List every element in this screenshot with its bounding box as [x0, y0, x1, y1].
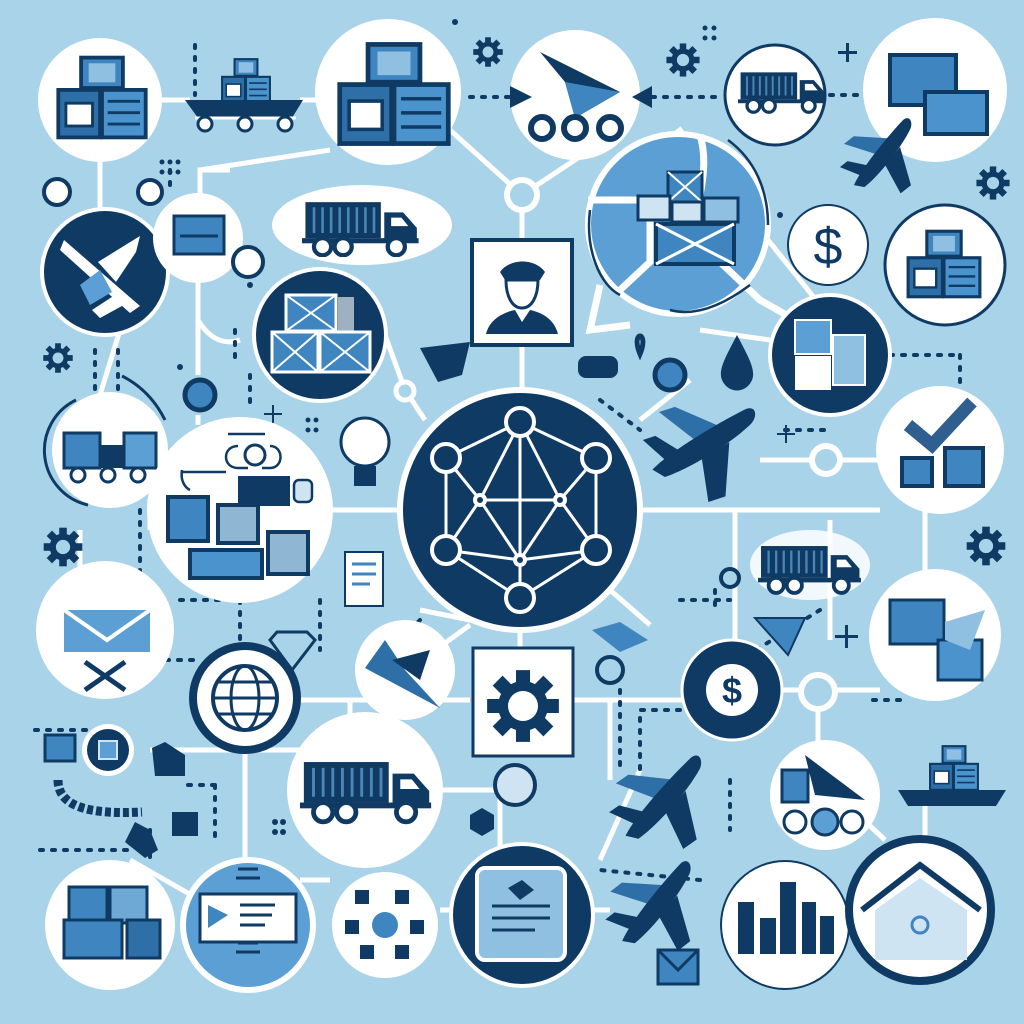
panel: plane small circle	[355, 620, 455, 720]
panel: truck left	[44, 376, 168, 508]
arrow: into plane, left	[510, 86, 532, 108]
node: ring small centre	[597, 657, 623, 683]
panel: large boxes left	[147, 417, 333, 603]
icon: gear left	[43, 343, 73, 373]
panel: house	[849, 839, 991, 981]
node: ring target	[495, 765, 535, 805]
node: ring left	[185, 380, 215, 410]
panel: chain and small crates	[45, 724, 198, 858]
icon: plane lower centre	[598, 735, 737, 872]
icon: light bulb	[341, 418, 389, 486]
panel: truck bottom	[287, 712, 443, 868]
icon: cargo ship	[185, 59, 303, 131]
node: ring top	[507, 180, 537, 210]
icon: cargo ship lower	[898, 746, 1006, 806]
small scattered dots and plus marks	[160, 19, 914, 835]
node: ring lower right	[801, 675, 835, 709]
panel: navy boxes right	[770, 295, 890, 415]
icon: plane bottom	[594, 843, 727, 974]
icon: plane top right	[830, 103, 942, 213]
icon: document	[345, 552, 383, 606]
panel: globe	[193, 646, 297, 750]
icon: blue fold shape	[592, 622, 648, 652]
icon: small hexagon	[470, 808, 494, 836]
panel: distribution cluster	[332, 872, 438, 978]
panel: plane on wheels	[510, 30, 640, 160]
panel: top-left boxes	[38, 38, 162, 162]
white connector lines	[80, 100, 925, 930]
icon: gear left lower	[44, 528, 82, 566]
panel: wheeled cargo	[770, 740, 880, 850]
panel: ticket	[183, 860, 313, 990]
icon: ring badge	[655, 360, 685, 390]
icon: blue fold arrow	[755, 618, 805, 655]
icon: small envelope bottom	[658, 950, 698, 984]
panel: navy crates	[254, 269, 386, 401]
panel: check mark	[876, 386, 1004, 514]
icon: small folded crate	[420, 342, 470, 382]
dotted connector lines	[35, 45, 960, 880]
panel: stacked boxes	[315, 19, 461, 165]
small node icons left	[44, 179, 263, 277]
panel: bar chart	[721, 861, 849, 989]
arrow: into plane, right	[632, 86, 652, 108]
panel: dollar gear: $	[722, 670, 742, 711]
panel: truck top	[725, 45, 825, 145]
icon: gear right lower	[967, 527, 1005, 565]
icon: small capsule	[578, 356, 618, 378]
icon: dollar coin	[788, 205, 868, 285]
icon: plane centre right	[636, 384, 777, 515]
panel: bottom-left boxes	[45, 860, 175, 990]
icon: location pin	[637, 336, 643, 354]
panel: right crates	[885, 205, 1005, 325]
panel: long truck	[272, 185, 452, 265]
panel: truck right	[750, 530, 870, 600]
panel: portrait of courier	[472, 240, 572, 345]
node: ring truck side	[721, 569, 739, 587]
panel: dollar gear	[682, 640, 782, 740]
icon: fuel drop	[721, 335, 753, 390]
icon: gear top 2	[666, 43, 700, 77]
panel: tablet	[451, 844, 593, 986]
panel: gear square	[473, 648, 573, 756]
panel: small card	[153, 193, 243, 283]
icon: gear right	[976, 166, 1010, 200]
icon: dollar coin: $	[814, 218, 843, 276]
node: ring right	[812, 446, 840, 474]
node: ring centre left	[396, 382, 414, 400]
panel: envelope	[36, 561, 174, 699]
icon: diamond	[270, 632, 315, 670]
panel: top-right boxes	[863, 18, 1007, 162]
panel: central network	[400, 390, 640, 630]
panel: globe with crates	[588, 134, 795, 330]
panel: right lower boxes	[869, 569, 1001, 701]
icon: gear top 1	[473, 37, 503, 67]
panel: navy plane circle	[42, 209, 168, 335]
